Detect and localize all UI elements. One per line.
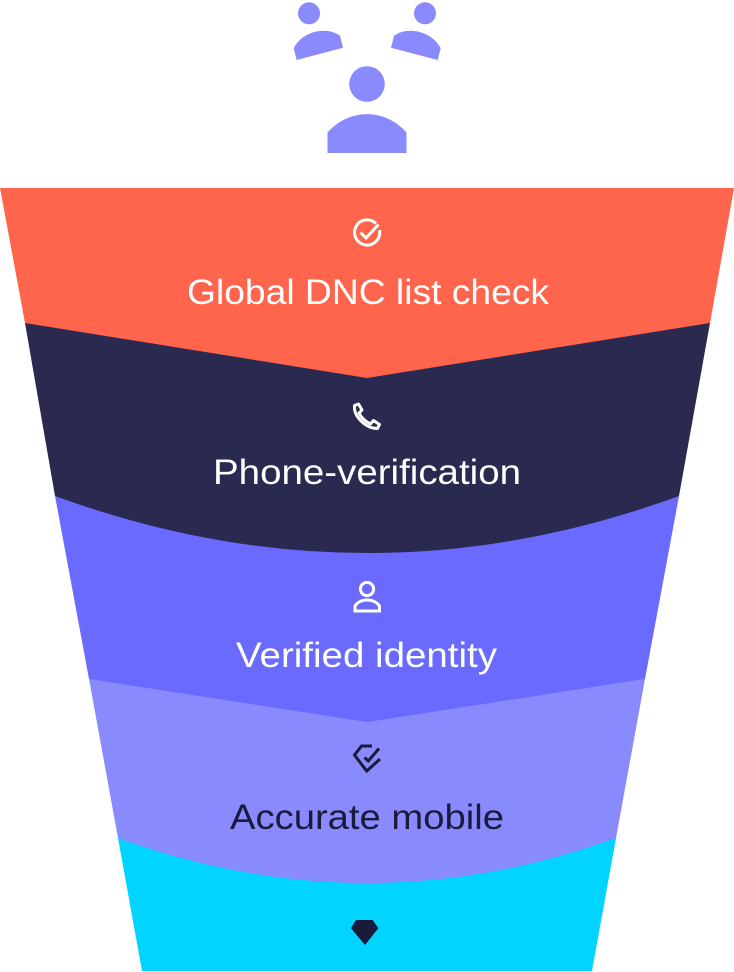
panel: verified identity xyxy=(55,496,679,722)
icon: check circle xyxy=(355,220,380,245)
icon: phone xyxy=(354,404,380,428)
heading: Verified identity: Verified identity xyxy=(236,636,498,675)
heading: Phone-verification: Phone-verification xyxy=(213,453,521,492)
panel: accurate result base xyxy=(118,838,616,971)
heading: Global DNC list check: Global DNC list check xyxy=(187,273,550,312)
icon: verified badge xyxy=(354,746,380,771)
heading: Accurate mobile: Accurate mobile xyxy=(230,798,504,837)
panel: phone verification xyxy=(25,323,710,553)
icon: person xyxy=(355,582,380,611)
icon: diamond xyxy=(351,920,378,945)
panel: accurate mobile xyxy=(89,679,645,883)
panel: global DNC list check xyxy=(0,188,734,378)
icon: three people xyxy=(294,2,441,153)
